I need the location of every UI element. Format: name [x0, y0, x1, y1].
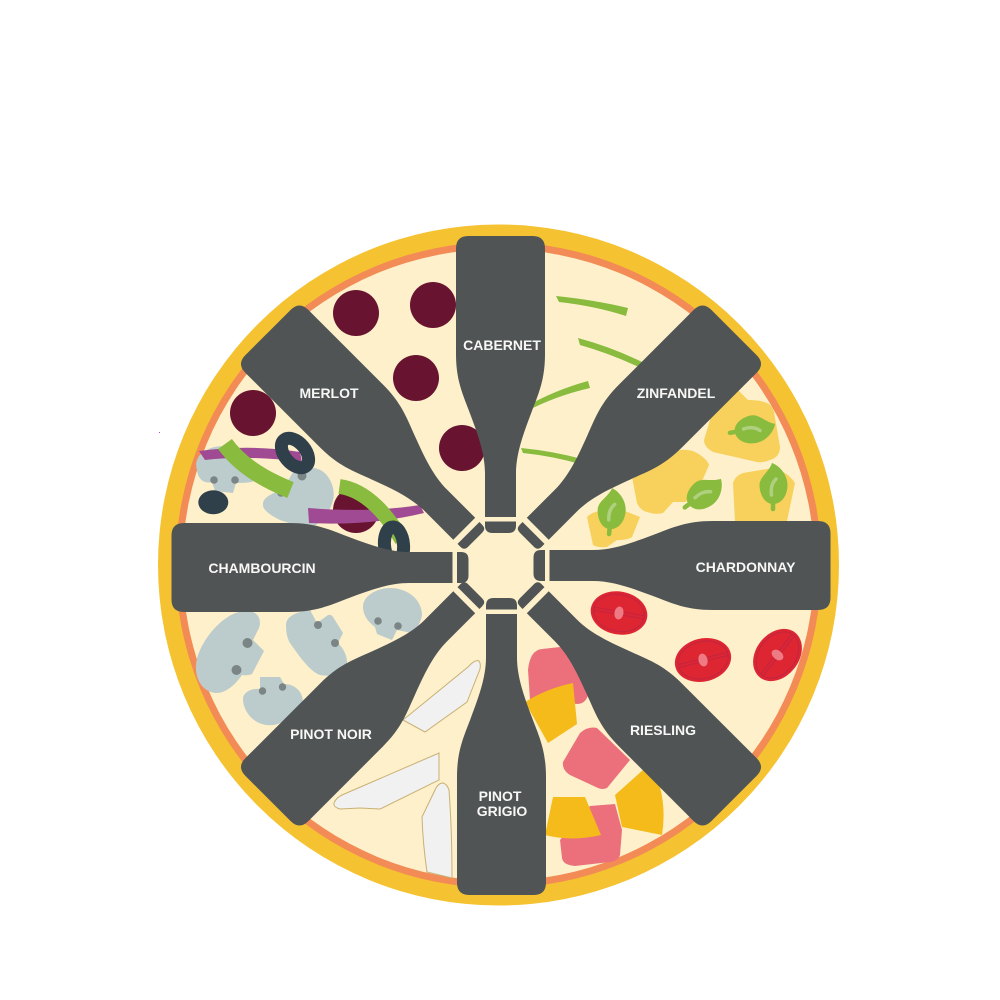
stray mark: [159, 432, 160, 433]
label: Chambourcin: CHAMBOURCIN: [208, 560, 316, 576]
toppings: white fish slices: [334, 661, 480, 878]
bottle: Chardonnay: [534, 521, 830, 610]
toppings: thin green strips: [521, 296, 648, 464]
bottle: Chambourcin: [172, 523, 468, 612]
label: Pinot Noir: PINOT NOIR: [290, 726, 372, 742]
cheese surface: [182, 249, 814, 881]
label: Zinfandel: ZINFANDEL: [637, 385, 716, 401]
toppings: green pepper strips: [225, 444, 402, 540]
label: Merlot: MERLOT: [299, 385, 359, 401]
bottle: Pinot Grigio: [457, 598, 546, 895]
crust: [158, 224, 839, 906]
toppings: mushrooms: [196, 446, 422, 725]
bottle: Zinfandel: [495, 301, 765, 571]
bottle: Riesling: [495, 560, 765, 830]
label: Cabernet: CABERNET: [463, 337, 541, 353]
label: Pinot Grigio: GRIGIO: [477, 803, 527, 819]
toppings: ham pieces: [528, 647, 630, 866]
pizza base: [158, 224, 839, 906]
toppings: pepperoni slices: [587, 587, 812, 691]
toppings: pineapple pieces: [525, 683, 664, 838]
sauce ring: [176, 242, 822, 888]
toppings: basil leaves: [596, 412, 788, 535]
label: Chardonnay: CHARDONNAY: [696, 559, 796, 575]
bottle: Merlot: [237, 301, 507, 571]
toppings: red onion strips: [199, 448, 424, 524]
bottle: Pinot Noir: [237, 560, 507, 830]
mushroom spots: [210, 472, 402, 695]
label: Riesling: RIESLING: [630, 722, 696, 738]
label: Pinot Grigio: PINOT: [479, 788, 522, 804]
toppings: yellow cheese chunks: [587, 390, 795, 547]
toppings: dark plum circles: [230, 282, 485, 533]
toppings: olives: [198, 433, 405, 564]
bottle: Cabernet: [456, 236, 545, 533]
